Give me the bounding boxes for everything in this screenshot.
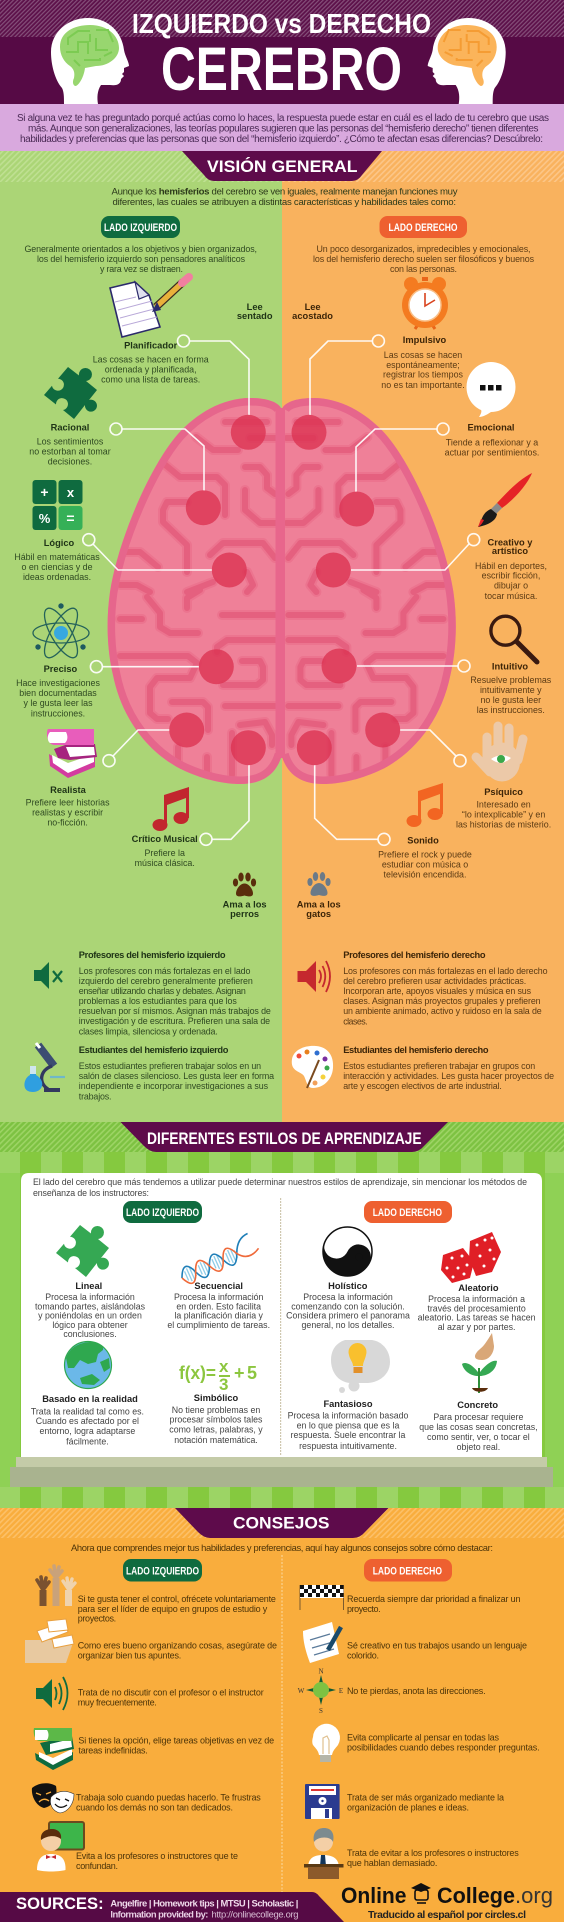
text: left summary: los del hemisferio izquierdo son pensadores analíticos [37, 254, 246, 264]
text: vision intro [112, 186, 458, 208]
text: fantasioso: respuesta. Suele encontrar la [291, 1430, 406, 1440]
text: secuencial: Procesa la información [174, 1292, 264, 1302]
panel: intro band [0, 104, 564, 151]
text: right summary: con las personas. [390, 264, 457, 274]
icon: folder with notes [25, 1619, 74, 1663]
label: realista: Prefiere leer historias [26, 798, 110, 808]
text: holístico: Considera primero el panorama [286, 1310, 410, 1320]
text: concreto: objeto real. [457, 1442, 500, 1452]
text: holístico: general, no los detalles. [302, 1320, 394, 1330]
text: holístico: Procesa la información [303, 1292, 393, 1302]
label: planificador [93, 340, 209, 384]
label: crítico musical: música clásica. [135, 858, 195, 868]
text: basado en la realidad: Cuando es afectado por el [36, 1416, 139, 1426]
footer: sources band: SOURCES: [16, 1894, 104, 1913]
text: right teachers: Profesores del hemisferio derecho [343, 950, 486, 960]
icon: math formula [179, 1357, 257, 1394]
label: intuitivo: no le gusta leer [480, 695, 541, 705]
label: lee acostado: acostado [292, 311, 333, 321]
badge: lado derecho consejos [364, 1559, 452, 1582]
icon: red music note [152, 787, 189, 831]
icon: dog paw [233, 872, 256, 896]
text: aleatorio: través del procesamiento [427, 1304, 526, 1314]
label: lee acostado [292, 302, 333, 321]
text: aleatorio [418, 1283, 536, 1332]
text: board intro: El lado del cerebro que más tendemos a utilizar puede determinar nuestros estilos de aprendizaje, sin mencionar los métodos de [33, 1177, 527, 1187]
text: fantasioso [288, 1399, 408, 1451]
icon: math formula: + 5 [234, 1363, 257, 1383]
label: psíquico: Psíquico [484, 787, 523, 797]
text: fantasioso: en lo que piensa que es la [297, 1420, 399, 1430]
badge: lado derecho board: LADO DERECHO [373, 1207, 442, 1219]
heading: diferentes estilos de aprendizaje [120, 1122, 448, 1152]
logo: onlinecollege.org: College [437, 1883, 515, 1908]
icon: artist palette [292, 1046, 333, 1088]
text: concreto: Concreto [457, 1400, 498, 1410]
text: left teachers [79, 950, 271, 1036]
icon: math formula: x [219, 1357, 229, 1376]
label: intuitivo: las instrucciones. [477, 705, 545, 715]
text: tip directions: No te pierdas, anota las direcciones. [347, 1686, 486, 1696]
icon: green books [34, 1728, 74, 1770]
label: lógico: Hábil en matemáticas [14, 552, 100, 562]
text: left teachers: investigación y de escritura. Prefieren una sala de [79, 1016, 270, 1026]
icon: math keypad: + [40, 484, 49, 500]
text: basado en la realidad: entorno, logra adaptarse [39, 1426, 135, 1436]
label: intuitivo: Intuitivo [492, 662, 528, 672]
icon: math keypad: % [39, 511, 51, 526]
text: lineal: Procesa la información [45, 1292, 135, 1302]
footer: sources band: http://onlinecollege.org [212, 1908, 298, 1920]
text: tip do not argue [78, 1688, 264, 1708]
panel: consejos background [0, 1508, 564, 1922]
icon: palm with eye [476, 726, 523, 782]
text: simbólico: notación matemática. [174, 1435, 258, 1445]
text: lineal: tomando partes, aislándolas [35, 1302, 146, 1312]
text: tip notes: Como eres bueno organizando cosas, asegúrate de [78, 1640, 277, 1650]
icon: green speaker [36, 1677, 68, 1710]
text: left students: independiente e incorporar investigaciones a sus [79, 1081, 269, 1091]
text: fantasioso: Fantasioso [323, 1399, 373, 1409]
label: impulsivo: Las cosas se hacen [384, 350, 462, 360]
label: ama a los perros: Ama a los [223, 900, 267, 910]
text: right students: Estos estudiantes prefieren trabajar en grupos con [343, 1061, 535, 1071]
text: basado en la realidad: Trata la realidad tal como es. [31, 1406, 144, 1416]
icon: stack of pink books [47, 729, 97, 778]
icon: math formula: f(x)= [179, 1363, 216, 1383]
text: tip finish project [347, 1594, 520, 1614]
label: impulsivo: espontáneamente; [386, 360, 460, 370]
icon: theatre masks [32, 1783, 74, 1813]
label: emocional: Tiende a reflexionar y a [446, 438, 538, 448]
label: realista [26, 785, 110, 828]
text: tip overthinking: posibilidades cuando debes responder preguntas. [347, 1742, 540, 1752]
label: racional: no estorban al tomar [29, 446, 111, 456]
text: tip talkative teachers [347, 1848, 519, 1868]
label: racional: decisiones. [48, 456, 92, 466]
text: right teachers: del cerebro prefieren usar actividades prácticas. [343, 976, 526, 986]
icon: hand over plant [462, 1333, 497, 1393]
brain highlight dots [169, 415, 400, 765]
logo: onlinecollege.org: .org [515, 1883, 553, 1908]
text: tip confusing teachers [76, 1851, 238, 1871]
panel: learning styles background [0, 1122, 564, 1508]
icon: speech bubble [466, 362, 516, 417]
icon: yin yang [315, 1227, 375, 1284]
label: emocional [445, 422, 539, 458]
logo: onlinecollege.org [341, 1883, 553, 1908]
text: tip organize [347, 1792, 504, 1812]
icon: orange music note [406, 783, 443, 827]
text: simbólico [169, 1393, 263, 1445]
connector end circles [83, 335, 480, 845]
panel: intro band: más. Aunque son generalizaciones, las teorías populares sugieren que las personas del “hemisferio derecho” tienen diferentes [28, 124, 538, 134]
text: left students: Estudiantes del hemisferio izquierdo [79, 1045, 229, 1055]
label: preciso [16, 664, 100, 718]
logo: onlinecollege.org: Online [341, 1883, 406, 1908]
badge: lado derecho [380, 216, 467, 238]
icon: green puzzle piece [44, 367, 97, 419]
label: sonido [378, 836, 472, 880]
panel: visión general right orange background [282, 151, 564, 1122]
text: tip confusing teachers: Evita a los profesores o instructores que te [76, 1851, 238, 1861]
label: lee sentado [237, 302, 273, 321]
label: crítico musical: Crítico Musical [132, 834, 198, 844]
panel: intro band: Si alguna vez te has preguntado porqué actúas como lo haces, la respuesta puede estar en cuál es el lado de tu cerebro que usas [17, 113, 549, 124]
text: tip team leader [78, 1594, 276, 1624]
text: left teachers: resuelvan por sí mismos. Asignan más trabajos de [79, 1006, 271, 1016]
text: concreto: Para procesar requiere [433, 1412, 523, 1422]
text: concreto: que las cosas sean concretas, [419, 1422, 538, 1432]
icon: right head with orange brain [428, 18, 506, 104]
text: board intro [33, 1177, 527, 1198]
icon: microscope and flask [24, 1043, 65, 1092]
footer: sources band [0, 1892, 344, 1922]
text: tip overthinking [347, 1732, 540, 1752]
icon: paint brush [478, 473, 532, 527]
icon: notepad and pencil [110, 277, 189, 337]
badge: lado izquierdo board [123, 1201, 202, 1223]
text: lineal: conclusiones. [63, 1329, 117, 1339]
icon: atom [33, 603, 89, 662]
label: intuitivo: Resuelve problemas [470, 675, 552, 685]
text: right teachers: clases. Asignan más proyectos grupales y prefieren [343, 996, 541, 1006]
panel: white learning styles board [10, 1173, 553, 1487]
label: lee sentado: Lee [247, 302, 263, 312]
label: creativo y artístico: tocar música. [485, 591, 537, 601]
text: tip do not argue: muy frecuentemente. [78, 1698, 157, 1708]
label: planificador: como una lista de tareas. [101, 374, 200, 384]
label: sonido: televisión encendida. [384, 870, 466, 880]
label: preciso: bien documentadas [19, 688, 97, 698]
icon: left head with green brain [51, 18, 129, 104]
text: right students [343, 1045, 554, 1091]
label: lee acostado: Lee [305, 302, 321, 312]
text: aleatorio: Procesa la información a [428, 1294, 525, 1304]
text: holístico: Holístico [328, 1281, 368, 1291]
text: fantasioso: Procesa la información basado [288, 1410, 408, 1420]
badge: lado izquierdo board: LADO IZQUIERDO [126, 1207, 199, 1219]
label: impulsivo [381, 335, 465, 390]
text: tip objective tasks: tareas indefinidas. [78, 1746, 148, 1756]
text: left students: salón de clases silencioso. Les gusta leer en forma [79, 1071, 274, 1081]
text: right students: arte y escogen electivos de arte industrial. [343, 1081, 502, 1091]
text: holístico: comenzando con la solución. [291, 1302, 405, 1312]
label: emocional: actuar por sentimientos. [445, 448, 539, 458]
footer: sources band: Angelfire | Homework tips | MTSU | Scholastic | [110, 1898, 298, 1908]
label: intuitivo [470, 662, 552, 715]
label: planificador: Planificador [124, 340, 178, 350]
icon: teacher at blackboard [37, 1822, 84, 1872]
text: vision intro: diferentes, las cuales se atribuyen a distintas características y habilidades tales como: [112, 197, 456, 208]
icon: compass [298, 1668, 343, 1715]
label: racional [29, 422, 111, 466]
badge: lado derecho board [364, 1201, 452, 1223]
text: left teachers: Los profesores con más fortalezas en el lado [79, 966, 250, 976]
badge: lado izquierdo: LADO IZQUIERDO [104, 222, 177, 234]
label: sonido: estudiar con música o [382, 860, 468, 870]
icon: floppy disk [305, 1784, 340, 1819]
text: vision intro: Aunque los hemisferios del cerebro se ven iguales, realmente manejan funciones muy [112, 186, 458, 198]
title: izquierdo vs derecho: IZQUIERDO vs DERECHO [132, 8, 431, 39]
text: right summary [313, 244, 535, 274]
icon: math keypad: x [67, 485, 75, 500]
text: left teachers: izquierdo del cerebro generalmente prefieren [79, 976, 253, 986]
icon: green puzzle [56, 1225, 109, 1277]
label: lógico: o en ciencias y de [21, 562, 93, 572]
icon: compass: E [339, 1687, 343, 1695]
text: right students: interacción y actividades. Les gusta hacer proyectos de [343, 1071, 554, 1081]
header background [0, 0, 564, 104]
badge: lado izquierdo consejos: LADO IZQUIERDO [126, 1566, 199, 1578]
badge: lado izquierdo [101, 216, 180, 238]
icon: dna helix [176, 1232, 261, 1286]
label: impulsivo: Impulsivo [403, 335, 447, 345]
text: fantasioso: respuesta intuitivamente. [299, 1441, 397, 1451]
text: simbólico: No tiene problemas en [172, 1405, 260, 1415]
text: tip finish project: proyecto. [347, 1604, 381, 1614]
icon: muted speaker [34, 962, 62, 989]
label: emocional: Emocional [467, 422, 515, 432]
label: lógico: Lógico [44, 538, 75, 548]
text: lineal: y poniéndolas en un orden [38, 1310, 142, 1320]
icon: compass: W [298, 1687, 305, 1695]
text: aleatorio: al azar y por partes. [438, 1322, 515, 1332]
label: preciso: instrucciones. [31, 708, 85, 718]
text: tip colorful language [347, 1640, 527, 1660]
connector lines [93, 341, 469, 839]
text: tip objective tasks: Si tienes la opción, elige tareas objetivas en vez de [78, 1736, 274, 1746]
label: sonido: Sonido [407, 836, 439, 846]
icon: compass: N [318, 1668, 324, 1676]
text: lineal: Lineal [75, 1281, 102, 1291]
label: ama a los perros [223, 900, 267, 919]
label: intuitivo: intuitivamente y [480, 685, 542, 695]
text: right teachers: Incorporan arte, apoyos visuales y música en sus [343, 986, 532, 996]
badge: lado derecho consejos: LADO DERECHO [373, 1566, 442, 1578]
icon: red speaker [298, 961, 330, 992]
text: tip objective tasks [78, 1736, 274, 1756]
icon: math keypad [32, 480, 82, 530]
text: left teachers: problemas a los estudiantes para que los [79, 996, 237, 1006]
text: tip colorful language: Sé creativo en tus trabajos usando un lenguaje [347, 1640, 527, 1650]
icon: professor at lectern [304, 1828, 344, 1879]
text: left summary: y rara vez se distraen. [100, 264, 183, 274]
badge: lado izquierdo consejos [123, 1559, 202, 1582]
text: tip notes: organizar bien tus apuntes. [78, 1650, 181, 1660]
icon: globe [64, 1342, 112, 1388]
text: tip colorful language: colorido. [347, 1650, 379, 1660]
brain illustration [100, 390, 463, 790]
label: impulsivo: registrar los tiempos [383, 370, 464, 380]
footer: sources band: Information provided by: [110, 1908, 208, 1920]
text: basado en la realidad [31, 1394, 144, 1446]
label: creativo y artístico: Creativo y [488, 538, 533, 548]
text: tip team leader: Si te gusta tener el control, ofrécete voluntariamente [78, 1594, 276, 1604]
text: tip team leader: para ser el líder de equipo en grupos de estudio y [78, 1604, 268, 1614]
icon: compass: S [319, 1707, 323, 1715]
heading: visión general [182, 151, 382, 181]
label: planificador: Las cosas se hacen en forma [93, 354, 209, 364]
text: tip talkative teachers: que hablan demasiado. [347, 1858, 437, 1868]
text: tip organize: Trata de ser más organizado mediante la [347, 1792, 504, 1802]
icon: alarm clock [402, 277, 448, 329]
icon: thought bubble with bulb [331, 1340, 390, 1393]
credit: translation: Traducido al español por circles.cl [368, 1909, 526, 1921]
label: creativo y artístico [475, 538, 547, 601]
label: psíquico: Interesado en [476, 800, 531, 810]
label: lógico [14, 538, 100, 582]
text: right teachers: clases. [343, 1016, 368, 1026]
text: secuencial: en orden. Esto facilita [176, 1302, 261, 1312]
text: right teachers [343, 950, 548, 1026]
label: sonido: Prefiere el rock y puede [378, 850, 472, 860]
text: right teachers: Los profesores con más fortalezas en el lado derecho [343, 966, 548, 976]
text: right students: Estudiantes del hemisferio derecho [343, 1045, 489, 1055]
text: left summary: Generalmente orientados a los objetivos y bien organizados, [24, 244, 257, 254]
label: ama a los gatos: gatos [306, 909, 331, 919]
label: creativo y artístico: dibujar o [494, 580, 528, 590]
text: secuencial: el cumplimiento de tareas. [167, 1320, 270, 1330]
label: psíquico: las historias de misterio. [456, 820, 551, 830]
text: secuencial: la planificación diaria y [174, 1310, 264, 1320]
label: lógico: ideas ordenadas. [23, 572, 91, 582]
panel: visión general left green background [0, 151, 282, 1122]
badge: lado derecho: LADO DERECHO [388, 222, 458, 234]
text: secuencial: Secuencial [194, 1281, 243, 1291]
icon: checkered finish flag [300, 1585, 344, 1610]
text: left teachers: enseñar utilizando charlas y debates. Asignan [79, 986, 246, 996]
text: tip team leader: proyectos. [78, 1614, 116, 1624]
panel: intro band: habilidades y preferencias que las personas que son del “hemisferio izquierdo”. ¿Cómo te afectan esas diferencias? Descúbrelo: [20, 134, 543, 145]
text: basado en la realidad: Basado en la realidad [42, 1394, 138, 1404]
icon: red dice [441, 1232, 501, 1283]
icon: magnifying glass [491, 616, 537, 662]
label: creativo y artístico: Hábil en deportes, [475, 561, 547, 571]
label: preciso: Hace investigaciones [16, 678, 100, 688]
text: simbólico: procesar símbolos tales [170, 1414, 263, 1424]
text: left summary [24, 244, 257, 274]
icon: math keypad: = [66, 510, 75, 526]
text: tip notes [78, 1640, 277, 1660]
label: ama a los gatos: Ama a los [297, 900, 341, 910]
text: tip organize: organización de planes e ideas. [347, 1802, 469, 1812]
label: realista: no-ficción. [47, 818, 88, 828]
icon: raised hands [37, 1566, 75, 1606]
label: preciso: y le gusta leer las [23, 698, 93, 708]
text: consejos intro: Ahora que comprendes mejor tus habilidades y preferencias, aquí hay algunos consejos sobre cómo destacar: [71, 1542, 493, 1553]
icon: white light bulb [312, 1724, 340, 1762]
text: right summary: Un poco desorganizados, impredecibles y emocionales, [316, 244, 530, 254]
label: realista: realistas y escribir [32, 808, 103, 818]
text: tip finish project: Recuerda siempre dar prioridad a finalizar un [347, 1594, 520, 1604]
icon: math formula: 3 [219, 1375, 228, 1394]
icon: paper and pen [303, 1622, 341, 1663]
label: preciso: Preciso [44, 664, 78, 674]
text: concreto [419, 1400, 538, 1452]
label: creativo y artístico: escribir ficción, [482, 570, 540, 580]
text: right summary: los del hemisferio derecho suelen ser filosóficos y buenos [313, 254, 535, 264]
text: secuencial [167, 1281, 270, 1330]
text: left students [79, 1045, 274, 1102]
heading: consejos [175, 1508, 388, 1538]
text: aleatorio: aleatorio. Las tareas se hacen [418, 1312, 536, 1322]
label: ama a los perros: perros [230, 909, 259, 919]
text: tip do not argue: Trata de no discutir con el profesor o el instructor [78, 1688, 264, 1698]
heading: visión general: VISIÓN GENERAL [207, 157, 358, 176]
icon: cat paw [307, 872, 331, 896]
text: left students: trabajos. [79, 1092, 112, 1102]
label: ama a los gatos [297, 900, 341, 919]
text: lineal: lógico para obtener [52, 1320, 128, 1330]
label: realista: Realista [50, 785, 87, 795]
text: tip work alone: cuando los demás no son tan dedicados. [76, 1802, 233, 1812]
label: racional: Racional [51, 422, 89, 432]
label: psíquico: “lo intexplicable” y en [462, 810, 545, 820]
text: tip talkative teachers: Trata de evitar a los profesores o instructores [347, 1848, 519, 1858]
text: right teachers: un ambiente animado, activo y ruidoso en la sala de [343, 1006, 542, 1016]
text: tip work alone: Trabaja solo cuando puedas hacerlo. Te frustras [76, 1792, 261, 1802]
text: simbólico: como letras, palabras, y [169, 1424, 263, 1434]
text: tip work alone [76, 1792, 261, 1812]
text: holístico [286, 1281, 410, 1330]
title: cerebro: CEREBRO [161, 35, 402, 103]
text: basado en la realidad: fácilmente. [66, 1436, 109, 1446]
label: crítico musical: Prefiere la [144, 848, 185, 858]
text: board intro: enseñanza de los instructores: [33, 1188, 149, 1198]
label: lee sentado: sentado [237, 311, 273, 321]
text: left teachers: Profesores del hemisferio izquierdo [79, 950, 226, 960]
text: left students: Estos estudiantes prefieren trabajar solos en un [79, 1061, 261, 1071]
text: lineal [35, 1281, 146, 1339]
label: crítico musical [132, 834, 198, 868]
text: tip overthinking: Evita complicarte al pensar en todas las [347, 1732, 500, 1742]
text: concreto: como sentir, ver, o tocar el [427, 1432, 530, 1442]
heading: diferentes estilos de aprendizaje: DIFERENTES ESTILOS DE APRENDIZAJE [147, 1129, 422, 1148]
label: planificador: ordenada y planificada, [105, 364, 197, 374]
text: tip confusing teachers: confundan. [76, 1861, 118, 1871]
text: aleatorio: Aleatorio [458, 1283, 499, 1293]
heading: consejos: CONSEJOS [233, 1513, 330, 1532]
text: left teachers: clases limpia, silenciosa y ordenada. [79, 1026, 218, 1036]
label: psíquico [456, 787, 551, 830]
text: simbólico: Simbólico [194, 1393, 239, 1403]
label: creativo y artístico: artístico [492, 546, 528, 556]
label: racional: Los sentimientos [37, 436, 104, 446]
label: impulsivo: no es tan importante. [381, 380, 465, 390]
